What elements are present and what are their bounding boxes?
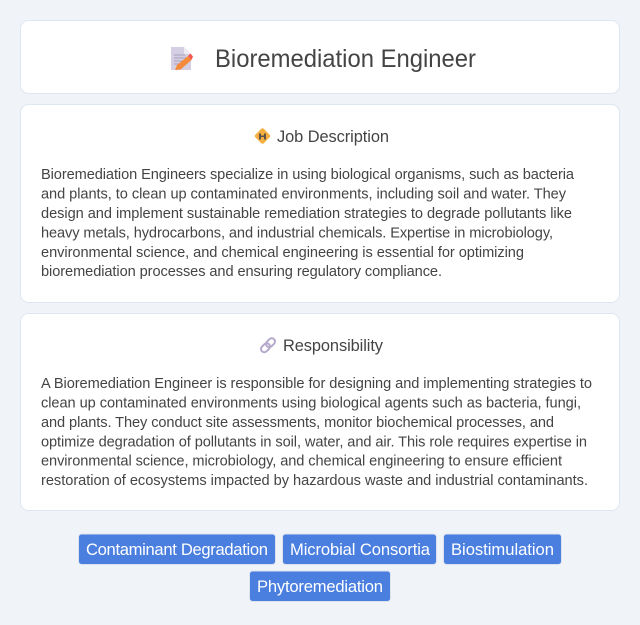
heading: responsibility: Responsibility [283,337,384,355]
text block: job description: design and implement sustainable remediation strategies to degrade pollutants like [41,206,572,222]
skill tags [78,534,562,602]
tag: microbial consortia [282,534,436,564]
text block: job description: Bioremediation Engineers specialize in using biological organisms, such as bacteria [41,167,575,183]
icon: document with pencil [171,47,193,70]
text block: job description: heavy metals, hydrocarbons, and industrial chemicals. Expertise in microbiology, [41,226,553,242]
tag: phytoremediation [250,571,390,602]
text block: responsibility: environmental science, microbiology, and chemical engineering to ensure efficient [41,454,562,470]
header panel [20,20,620,94]
text block: job description: environmental science, and chemical engineering is essential for optimizing [41,245,524,261]
tag: microbial consortia: Microbial Consortia [290,540,431,559]
icon: orange diamond [254,128,271,144]
text block: job description: and plants, to clean up contaminated environments, including soil and water. They [41,186,567,202]
text block: job description [41,167,575,280]
text block: responsibility: A Bioremediation Engineer is responsible for designing and implementing strategies to [41,376,592,392]
text block: responsibility: and plants. They conduct site assessments, monitor biochemical processes, and [41,415,554,431]
text block: responsibility: restoration of ecosystems impacted by hazardous waste and industrial contaminants. [41,473,588,489]
icon: chain link [260,337,276,354]
text block: responsibility [41,376,592,489]
heading: job description: Job Description [277,128,389,146]
panel: responsibility [20,314,620,510]
tag: biostimulation [444,534,562,564]
tag: contaminant degradation [78,534,276,564]
text block: responsibility: clean up contaminated environments using biological agents such as bacteria, fungi, [41,396,581,412]
panel: job description [20,104,620,302]
text block: responsibility: optimize degradation of pollutants in soil, water, and air. This role requires expertise in [41,434,587,450]
tag: phytoremediation: Phytoremediation [257,577,383,596]
tag: biostimulation: Biostimulation [451,540,554,559]
tag: contaminant degradation: Contaminant Degradation [86,540,268,559]
title: Bioremediation Engineer [215,45,476,73]
text block: job description: bioremediation processes and ensuring regulatory compliance. [41,264,442,280]
